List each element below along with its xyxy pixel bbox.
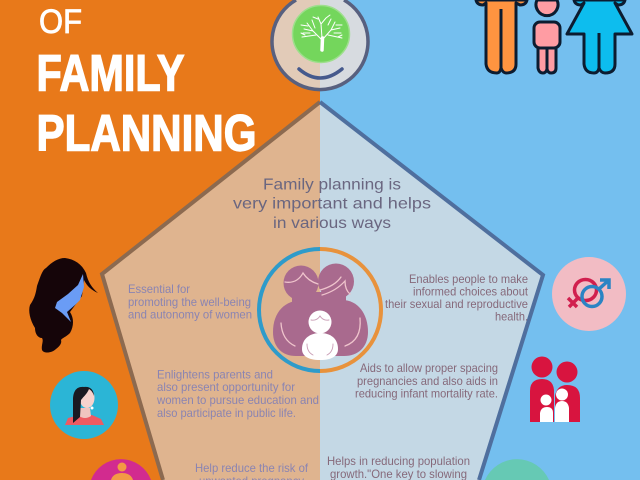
benefit: population growth: Helps in reducing population xyxy=(327,454,470,468)
parents silhouette xyxy=(273,264,368,356)
left parent head xyxy=(284,266,318,300)
face xyxy=(55,274,84,322)
panel: top logo badge xyxy=(271,0,369,90)
text: left benefits xyxy=(128,282,319,480)
father body xyxy=(530,379,554,422)
man leg divider xyxy=(500,9,502,68)
benefit: spacing pregnancies: Aids to allow proper spacing xyxy=(360,361,498,375)
pentagon left half xyxy=(102,102,320,480)
father head xyxy=(532,356,552,378)
avatar neck xyxy=(79,408,91,418)
intro line 2: very important and helps xyxy=(233,196,431,212)
ring right arc xyxy=(320,249,381,371)
icon: teal avatar xyxy=(50,371,118,439)
child silhouette xyxy=(302,310,338,360)
child legs xyxy=(538,46,556,73)
child details xyxy=(307,316,333,355)
parents bodies xyxy=(273,300,368,356)
avatar hair xyxy=(73,387,94,423)
avatar earring xyxy=(90,406,94,410)
benefit: informed choices: Enables people to make xyxy=(409,272,528,286)
female symbol xyxy=(568,280,596,307)
benefit: population growth xyxy=(327,454,470,480)
benefit: education and public life xyxy=(156,368,319,420)
child one head xyxy=(540,394,552,406)
child head xyxy=(308,310,332,334)
avatar face xyxy=(80,388,94,408)
benefit: informed choices: health. xyxy=(495,310,528,324)
badge right half xyxy=(320,0,369,90)
badge ring xyxy=(272,0,368,90)
intro line 1: Family planning is xyxy=(263,176,401,194)
benefit: women's autonomy: Essential for xyxy=(128,282,190,296)
icon: family pictograms xyxy=(476,0,632,73)
intro text xyxy=(233,176,431,232)
icon: central family in ring xyxy=(259,249,381,371)
title line: OF: OF xyxy=(39,3,82,41)
benefit: informed choices: informed choices about xyxy=(413,284,529,298)
benefit: education and public life: women to pursue education and xyxy=(156,393,319,407)
male symbol xyxy=(582,280,609,306)
benefit: education and public life: also present opportunity for xyxy=(157,380,295,394)
benefit: women's autonomy: and autonomy of women xyxy=(128,308,252,322)
icon: red family xyxy=(530,356,580,422)
benefit: spacing pregnancies: reducing infant mortality rate. xyxy=(355,386,498,400)
gender disc xyxy=(552,257,626,331)
pentagon left border xyxy=(102,102,320,480)
pentagon right border xyxy=(320,102,543,480)
child leg divider xyxy=(546,48,548,69)
hair xyxy=(29,258,98,353)
icon: magenta person disc xyxy=(91,459,151,480)
intro line 3: in various ways xyxy=(273,215,391,232)
child head xyxy=(536,0,558,16)
title xyxy=(36,3,256,162)
pentagon right half xyxy=(320,102,543,480)
icon: gender symbols xyxy=(552,257,626,331)
background: orange left half xyxy=(0,0,320,480)
icon: white tree xyxy=(301,15,342,50)
benefit: education and public life: also participate in public life. xyxy=(157,406,296,420)
benefit: unwanted pregnancy: Help reduce the risk of xyxy=(195,461,309,475)
ring left arc xyxy=(259,249,320,371)
right parent head xyxy=(318,264,354,300)
benefit: informed choices: their sexual and reproductive xyxy=(385,297,528,311)
panel: central pentagon xyxy=(102,102,543,480)
badge left half xyxy=(271,0,320,90)
icon: man xyxy=(476,0,527,73)
icon: woman with long hair xyxy=(29,258,98,353)
child two head xyxy=(556,388,568,400)
green disc xyxy=(292,6,350,62)
benefit: spacing pregnancies xyxy=(355,361,498,400)
benefit: spacing pregnancies: pregnancies and also aids in xyxy=(357,374,498,388)
person body xyxy=(111,473,133,480)
avatar shoulders xyxy=(65,415,104,425)
smile arc xyxy=(299,69,342,78)
avatar disc xyxy=(50,371,118,439)
title line: PLANNING: PLANNING xyxy=(36,104,256,162)
person head xyxy=(118,462,126,472)
benefit: education and public life: Enlightens parents and xyxy=(157,368,273,382)
icon: teal disc at bottom xyxy=(485,459,549,480)
title line: FAMILY: FAMILY xyxy=(36,44,184,102)
parents hair and arm lines xyxy=(281,273,360,346)
child two body xyxy=(555,401,569,422)
icon: woman xyxy=(567,0,632,73)
woman leg divider xyxy=(598,33,600,68)
background: blue right half xyxy=(320,0,640,480)
text: right benefits xyxy=(327,272,529,480)
benefit: informed choices xyxy=(385,272,529,324)
parents necks xyxy=(292,292,346,306)
child body xyxy=(302,333,338,360)
person disc xyxy=(91,459,151,480)
benefit: women's autonomy xyxy=(128,282,252,322)
child body xyxy=(534,22,560,48)
child one body xyxy=(540,407,553,422)
mother body xyxy=(555,385,580,422)
benefit: women's autonomy: promoting the well-being xyxy=(128,295,251,309)
icon: child xyxy=(534,0,560,73)
mother head xyxy=(556,362,578,382)
